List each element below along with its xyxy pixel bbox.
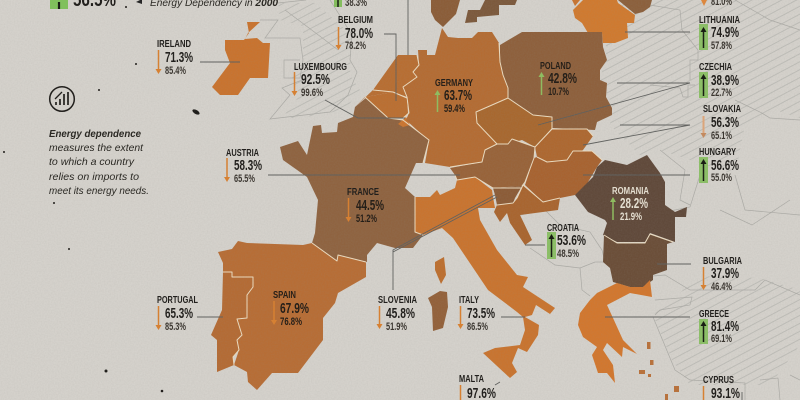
map: Croatia bbox=[494, 185, 560, 245]
label: Hungary: HUNGARY bbox=[699, 146, 736, 158]
label: Netherlands fragment bbox=[334, 0, 367, 9]
map: Lithuania bbox=[573, 0, 635, 43]
label: Belgium bbox=[336, 14, 373, 52]
map: Poland bbox=[500, 32, 612, 130]
label: Portugal bbox=[156, 294, 198, 333]
map: Hungary bbox=[525, 151, 602, 202]
map: Luxembourg bbox=[398, 117, 410, 127]
map: Czechia bbox=[476, 98, 552, 147]
label: Cyprus: CYPRUS bbox=[703, 374, 734, 386]
map: France bbox=[280, 97, 429, 262]
label: Slovakia: 65.1% bbox=[711, 130, 732, 142]
label: Luxembourg: 99.6% bbox=[301, 87, 323, 99]
label: Germany: GERMANY bbox=[435, 77, 473, 89]
label: Germany bbox=[434, 77, 473, 115]
label: Slovenia bbox=[376, 294, 417, 333]
label: France: 44.5% bbox=[356, 197, 384, 214]
leader lines bbox=[197, 0, 742, 400]
hatched neighbouring land bbox=[278, 0, 800, 385]
label: Poland: POLAND bbox=[540, 60, 571, 72]
label: Greece: GREECE bbox=[699, 308, 729, 320]
map: Germany bbox=[403, 28, 508, 167]
label: Lithuania: LITHUANIA bbox=[699, 14, 740, 26]
label: Ireland bbox=[156, 38, 193, 77]
icon: rising bar chart bbox=[50, 87, 74, 111]
map: Netherlands bbox=[355, 55, 419, 107]
label: Spain bbox=[271, 289, 309, 328]
label: Lithuania: 74.9% bbox=[711, 24, 739, 41]
label: Portugal: PORTUGAL bbox=[157, 294, 198, 306]
label: Luxembourg: 92.5% bbox=[301, 71, 330, 88]
map: Denmark and Scandinavia fragments bbox=[431, 0, 517, 27]
map: Bulgaria bbox=[603, 234, 673, 287]
outlines: neighbouring countries bbox=[260, 0, 800, 400]
label: Bulgaria: 46.4% bbox=[711, 281, 732, 293]
label: Bulgaria bbox=[700, 255, 742, 293]
map: interior borders bbox=[223, 43, 673, 365]
label: Ireland: 71.3% bbox=[165, 49, 193, 66]
label: Romania: 28.2% bbox=[620, 195, 648, 212]
label: Croatia: 53.6% bbox=[557, 232, 586, 249]
label: Italy bbox=[458, 294, 495, 333]
label: Greece: 81.4% bbox=[711, 318, 739, 335]
map: Portugal bbox=[211, 272, 253, 372]
label: Croatia bbox=[547, 222, 586, 260]
label: Slovenia: 51.9% bbox=[386, 321, 407, 333]
label: Poland: 10.7% bbox=[548, 86, 569, 98]
label: Malta: MALTA bbox=[459, 373, 484, 385]
label: Slovenia: SLOVENIA bbox=[378, 294, 417, 306]
map: Spain bbox=[218, 241, 366, 390]
label: Hungary: 56.6% bbox=[711, 157, 739, 174]
map: Latvia bbox=[618, 0, 652, 14]
label: Czechia: 38.9% bbox=[711, 72, 739, 89]
label: Romania: 21.9% bbox=[620, 211, 642, 223]
map: Greece bbox=[578, 280, 652, 383]
label: Romania bbox=[610, 185, 649, 223]
label: Belgium: 78.0% bbox=[345, 25, 373, 42]
label: Ireland: 85.4% bbox=[165, 65, 186, 77]
label: Italy: 73.5% bbox=[467, 305, 495, 322]
label: Latvia fragment bbox=[701, 0, 732, 8]
label: Belgium: BELGIUM bbox=[338, 14, 373, 26]
label: Lithuania bbox=[699, 14, 740, 52]
map: Slovakia bbox=[535, 129, 593, 162]
label: Slovakia: 56.3% bbox=[711, 114, 739, 131]
header: total value bbox=[50, 0, 116, 11]
label: Romania: ROMANIA bbox=[612, 185, 649, 197]
text block: energy dependence definition: relies on imports to bbox=[49, 171, 139, 183]
label: France: 51.2% bbox=[356, 213, 377, 225]
label: Austria: 58.3% bbox=[234, 157, 262, 174]
text block: energy dependence definition: meet its energy needs. bbox=[49, 185, 149, 197]
label: Luxembourg bbox=[292, 61, 347, 99]
label: France bbox=[346, 186, 384, 225]
label: Belgium: 78.2% bbox=[345, 40, 366, 52]
label: Poland bbox=[538, 60, 577, 98]
label: Italy: ITALY bbox=[459, 294, 479, 306]
label: Spain: 76.8% bbox=[280, 316, 302, 328]
text block: energy dependence definition: Energy dependence bbox=[49, 128, 141, 140]
label: Croatia: CROATIA bbox=[547, 222, 579, 234]
label: Austria: AUSTRIA bbox=[226, 147, 259, 159]
paper specks bbox=[3, 6, 200, 392]
map: Italy bbox=[415, 177, 555, 378]
label: Slovenia: 45.8% bbox=[386, 305, 415, 322]
label: Poland: 42.8% bbox=[548, 70, 577, 87]
map: Slovenia bbox=[493, 186, 522, 205]
label: Slovakia: SLOVAKIA bbox=[703, 103, 741, 115]
label: Austria: 65.5% bbox=[234, 173, 255, 185]
label: Czechia: CZECHIA bbox=[699, 61, 732, 73]
label: Czechia bbox=[699, 61, 739, 99]
map: Romania bbox=[575, 155, 687, 242]
label: Hungary bbox=[699, 146, 739, 184]
map: Austria bbox=[450, 139, 535, 188]
label: Czechia: 22.7% bbox=[711, 87, 732, 99]
label: Hungary: 55.0% bbox=[711, 172, 732, 184]
label: Lithuania: 57.8% bbox=[711, 40, 732, 52]
map: Greek islands bbox=[639, 342, 679, 400]
map: Ireland bbox=[212, 22, 270, 95]
label: Spain: 67.9% bbox=[280, 300, 309, 317]
label: Germany: 63.7% bbox=[444, 87, 472, 104]
label: Germany: 59.4% bbox=[444, 103, 465, 115]
label: Portugal: 65.3% bbox=[165, 305, 193, 322]
label: Austria bbox=[224, 147, 262, 185]
label: Cyprus bbox=[703, 374, 740, 400]
text block: energy dependence definition: measures the extent bbox=[49, 142, 144, 154]
map: Sardinia bbox=[428, 291, 448, 331]
label: Italy: 86.5% bbox=[467, 321, 488, 333]
text block: energy dependence definition: to which a country bbox=[49, 156, 135, 168]
label: Luxembourg: LUXEMBOURG bbox=[294, 61, 347, 73]
label: France: FRANCE bbox=[347, 186, 379, 198]
label: Slovakia bbox=[700, 103, 741, 142]
label: Greece: 69.1% bbox=[711, 333, 732, 345]
map: Belgium bbox=[365, 92, 408, 118]
label: Croatia: 48.5% bbox=[557, 248, 579, 260]
label: Bulgaria: 37.9% bbox=[711, 265, 739, 282]
map: Estonia fragment bbox=[572, 0, 580, 6]
label: Spain: SPAIN bbox=[273, 289, 296, 301]
label: Ireland: IRELAND bbox=[157, 38, 191, 50]
label: Greece bbox=[699, 308, 739, 345]
label: Portugal: 85.3% bbox=[165, 321, 186, 333]
text block: energy dependence definition bbox=[49, 128, 149, 197]
map: Corsica bbox=[435, 257, 446, 284]
label: Bulgaria: BULGARIA bbox=[703, 255, 742, 267]
label: Malta bbox=[459, 373, 496, 400]
